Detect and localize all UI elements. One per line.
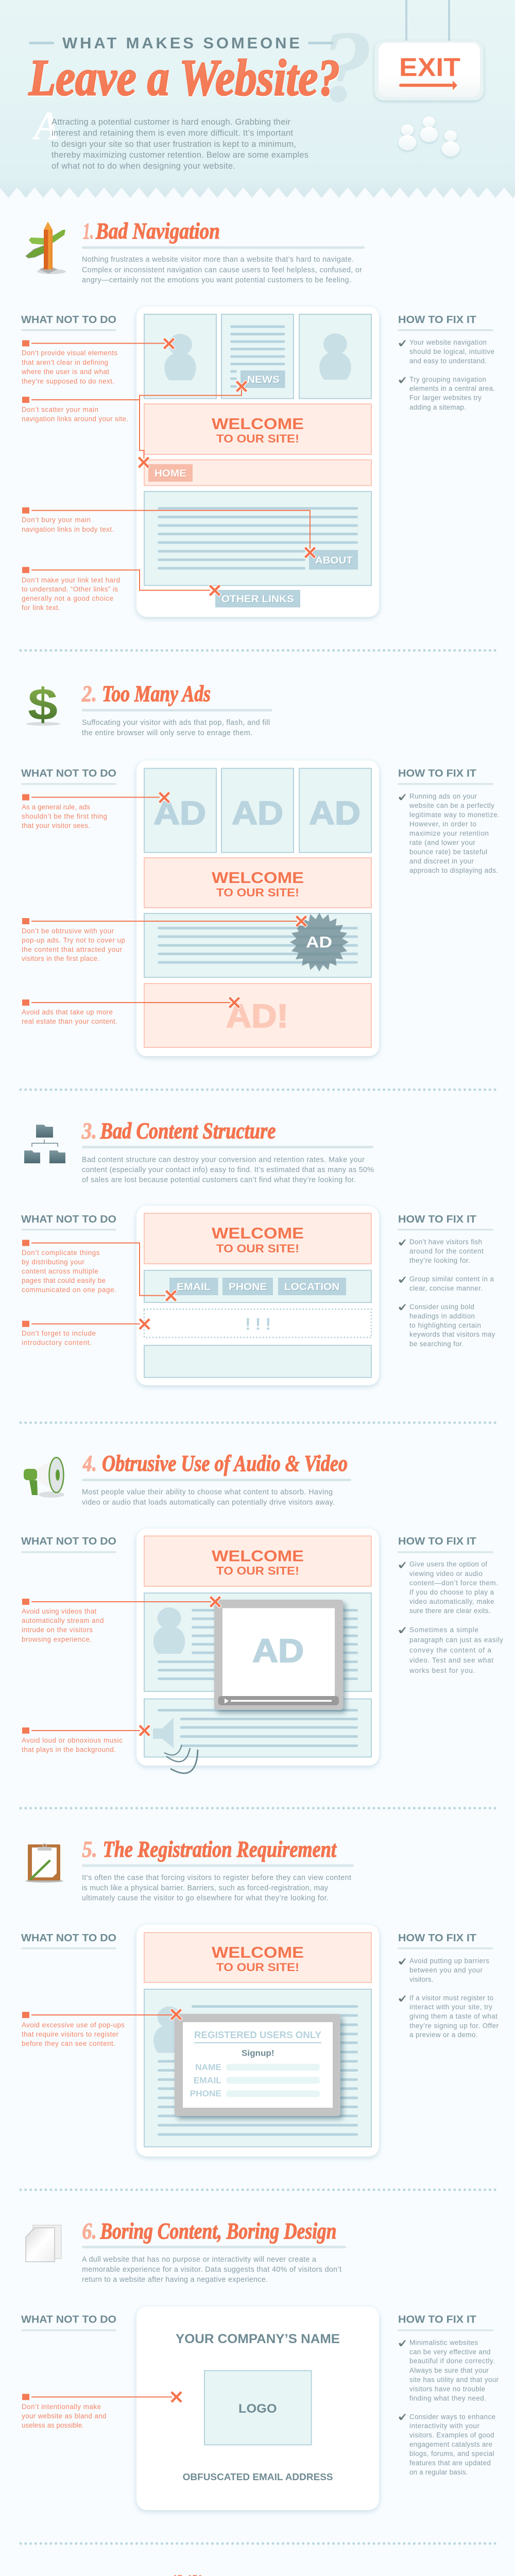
fix tip 1 [399, 1957, 489, 1983]
welcome banner: TO OUR SITE! [216, 1242, 299, 1255]
fix tip 1: If you do choose to play a [409, 1588, 494, 1596]
heading: Bad Navigation [95, 218, 220, 244]
callout 3 text: real estate than your content. [22, 1018, 117, 1025]
welcome banner: WELCOME [212, 1547, 304, 1565]
welcome banner [144, 1213, 371, 1264]
fix tip: and discreet in your [409, 857, 474, 865]
callout 2 text: navigation links around your site. [22, 415, 128, 422]
fix tip 1 [399, 338, 494, 365]
fix tip [399, 792, 500, 874]
callout 2 text: Don’t be obtrusive with your [22, 927, 114, 935]
callout 1 text: pages that could easily be [22, 1277, 106, 1284]
callout 1 text: Avoid using videos that [22, 1607, 97, 1615]
fix tip 3: headings in addition [409, 1312, 475, 1320]
description: ultimately cause the visitor to go elsewhere for what they’re looking for. [82, 1894, 329, 1903]
welcome banner [144, 858, 371, 908]
column with news link [221, 314, 294, 399]
fix tip 1: between you and your [409, 1967, 483, 1974]
how to fix it heading [398, 1933, 493, 1950]
fix tip 1: Don’t have visitors fish [409, 1238, 482, 1246]
website mockup panel [136, 1206, 379, 1385]
callout 3 text: navigation links in body text. [22, 526, 114, 533]
callout 2 [22, 380, 248, 469]
callout 3 [22, 507, 316, 558]
callout text: Don’t intentionally make [22, 2403, 101, 2411]
description: memorable experience for a visitor. Data suggests that 40% of visitors don’t [82, 2266, 341, 2274]
company name: YOUR COMPANY’S NAME [176, 2332, 340, 2346]
section 6: boring content boring design [21, 2218, 499, 2510]
how to fix it heading [398, 2314, 493, 2331]
fix tip 3: keywords that visitors may [409, 1331, 495, 1338]
fix tip: Running ads on your [409, 792, 477, 800]
callout 1 text: content across multiple [22, 1267, 98, 1275]
intro text: of what not to do when designing your website. [52, 162, 235, 171]
intro text: thereby maximizing customer retention. Below are some examples [52, 150, 308, 160]
fix tip 2: video. Test and see what [409, 1656, 493, 1664]
callout 2 text [22, 927, 125, 962]
callout 2 text: introductory content. [22, 1339, 92, 1347]
fix tip 2: elements in a central area. [409, 385, 495, 393]
callout 4 text: to understand. “Other links” is [22, 585, 118, 593]
fix tip 2: Try grouping navigation [409, 376, 486, 383]
fix tip: rate (and lower your [409, 839, 476, 846]
fix tip 1 [399, 1561, 498, 1615]
content block [144, 1345, 371, 1378]
heading: 2. [81, 681, 97, 706]
callout 1 text: Don’t complicate things [22, 1249, 100, 1257]
callout 1 text: Don’t provide visual elements [22, 349, 117, 357]
fix tip: approach to displaying ads. [409, 867, 498, 874]
callout 2 [22, 1724, 151, 1737]
fix tip 2: Group similar content in a [409, 1275, 494, 1283]
what not to do heading: WHAT NOT TO DO [21, 768, 116, 779]
welcome banner: WELCOME [212, 869, 304, 887]
callout text: your website as bland and [22, 2412, 106, 2420]
welcome banner [144, 1536, 371, 1586]
video popup: AD [252, 1632, 304, 1669]
registration popup: NAME [195, 2062, 221, 2072]
description: video or audio that loads automatically can potentially drive visitors away. [82, 1499, 335, 1507]
description: Complex or inconsistent navigation can cause users to feel helpless, confused, or [82, 266, 362, 275]
callout 2 [22, 915, 307, 927]
content block with person [144, 1593, 371, 1691]
callout 1 text: shouldn’t be the first thing [22, 812, 107, 820]
callout 3 text [22, 1008, 117, 1025]
what not to do heading [21, 314, 116, 331]
fix tip: bounce rate) be tasteful [409, 848, 487, 856]
section 7: poor legibility [20, 2571, 496, 2576]
fix tip 1: Your website navigation [409, 338, 487, 346]
body with popup ad [144, 913, 371, 977]
fix tip 1: sure there are clear exits. [409, 1607, 490, 1615]
description: return to a website after having a negative experience. [82, 2276, 268, 2284]
fix tip: website can be a perfectly [409, 802, 494, 809]
callout 1 text: As a general rule, ads [22, 803, 90, 811]
missing intro placeholder [144, 1309, 371, 1337]
registration popup: REGISTERED USERS ONLY [194, 2029, 322, 2040]
welcome banner: TO OUR SITE! [216, 886, 299, 899]
what not to do heading: WHAT NOT TO DO [21, 314, 116, 326]
what not to do heading: WHAT NOT TO DO [21, 1214, 116, 1225]
callout [22, 2391, 182, 2403]
what not to do heading [21, 1536, 116, 1553]
welcome banner [144, 1933, 371, 1982]
column with person [144, 314, 216, 399]
heading: 4. [82, 1451, 97, 1476]
fix tip 2: Consider ways to enhance [409, 2413, 495, 2420]
icon: signpost [26, 222, 66, 274]
description: Most people value their ability to choose what content to absorb. Having [82, 1488, 333, 1497]
fix tip 1: video automatically, make [409, 1598, 494, 1605]
how to fix it heading [398, 768, 493, 785]
welcome banner: WELCOME [212, 1943, 304, 1961]
how to fix it heading [398, 314, 493, 331]
description [82, 1156, 374, 1184]
ad column 1 [144, 768, 216, 853]
heading: Obtrusive Use of Audio & Video [102, 1451, 348, 1476]
intro text: Attracting a potential customer is hard enough. Grabbing their [52, 117, 290, 127]
content block [144, 1989, 371, 2147]
oversized ad: AD! [226, 997, 288, 1035]
fix tip 1 [399, 1238, 484, 1264]
callout 1 text: they’re supposed to do next. [22, 377, 114, 385]
callout 2 text: that plays in the background. [22, 1745, 116, 1753]
description [82, 2256, 341, 2284]
icon: folder tree [24, 1125, 65, 1163]
callout 2 text: Don’t scatter your main [22, 406, 98, 414]
callout 1 [22, 1240, 177, 1302]
body content with about link: ABOUT [315, 555, 353, 566]
heading: Bad Content Structure [100, 1118, 276, 1144]
what not to do heading: WHAT NOT TO DO [21, 1933, 116, 1944]
fix tip 2: works best for you. [409, 1667, 475, 1674]
icon: megaphone [24, 1458, 64, 1498]
heading: The Registration Requirement [103, 1837, 337, 1862]
ad column 2 [221, 768, 294, 853]
video popup [214, 1600, 343, 1710]
nav tabs [144, 1270, 371, 1302]
email address: OBFUSCATED EMAIL ADDRESS [183, 2472, 333, 2482]
what not to do heading [21, 1214, 116, 1230]
callout [22, 2008, 182, 2021]
registration popup: PHONE [190, 2089, 221, 2098]
heading: 3. [81, 1118, 97, 1144]
icon: speaker [153, 1718, 198, 1773]
icon: dollar sign: $ [28, 680, 58, 730]
fix tip 1: viewing video or audio [409, 1570, 483, 1578]
heading: Too Many Ads [102, 681, 211, 706]
three people icon [399, 116, 459, 157]
exit sign: EXIT [399, 53, 460, 81]
fix tip 1: site has utility and that your [409, 2376, 499, 2384]
missing intro placeholder: !!! [245, 1315, 271, 1333]
heading [82, 1451, 351, 1481]
registration popup [175, 2014, 340, 2116]
ad column 3: AD [309, 794, 360, 832]
section 1: bad navigation [21, 218, 495, 617]
ad column 3 [299, 768, 371, 853]
fix tip 2: clear, concise manner. [409, 1284, 483, 1292]
callout 2 text: pop-up ads. Try not to cover up [22, 937, 125, 944]
callout 4 [22, 567, 221, 597]
fix tip 3 [399, 1303, 495, 1348]
description [82, 719, 270, 737]
callout 1 text: that your visitor sees. [22, 822, 90, 829]
callout 1 [22, 1596, 221, 1608]
callout 1 text [21, 349, 117, 385]
description: Nothing frustrates a website visitor more than a website that’s hard to navigate. [82, 256, 354, 264]
nav tabs: EMAIL [177, 1281, 211, 1293]
body content with about link [144, 492, 371, 585]
callout text: before they can see content. [22, 2040, 115, 2047]
description: A dull website that has no purpose or interactivity will never create a [82, 2256, 316, 2264]
callout 1 text [22, 1249, 116, 1294]
fix tip 1: Minimalistic websites [409, 2338, 478, 2346]
fix tip 2: paragraph can just as easily [409, 1636, 503, 1643]
how to fix it heading [398, 1214, 493, 1230]
callout 3 [22, 996, 241, 1009]
description: Suffocating your visitor with ads that pop, flash, and fill [82, 719, 270, 727]
callout 1 text: by distributing your [22, 1258, 85, 1266]
welcome banner: WELCOME [212, 415, 304, 433]
callout 4 text [22, 577, 120, 612]
description [82, 256, 362, 284]
callout text: useless as possible. [22, 2421, 84, 2429]
callout text [22, 2021, 125, 2047]
callout 1 text: automatically stream and [22, 1617, 104, 1624]
fix tip 1: Always be sure that your [409, 2367, 489, 2375]
callout 1 text: where the user is and what [21, 368, 109, 376]
starburst [290, 913, 349, 972]
large pale question mark: ? [320, 10, 373, 124]
nav bar with home link [144, 460, 371, 485]
header background [0, 0, 515, 198]
how to fix it heading: HOW TO FIX IT [398, 2314, 476, 2326]
logo box: LOGO [238, 2402, 277, 2416]
what not to do heading: WHAT NOT TO DO [21, 1536, 116, 1547]
section 4: obtrusive audio and video [21, 1451, 503, 1773]
content block with speaker [144, 1699, 371, 1773]
intro text: interest and retaining them is even more difficult. It’s important [52, 129, 293, 138]
description [82, 1488, 335, 1507]
fix tip 2: visitors. Examples of good [409, 2431, 494, 2439]
website mockup panel [136, 760, 379, 1056]
fix tip 2: adding a sitemap. [409, 403, 466, 411]
welcome banner: TO OUR SITE! [216, 1564, 299, 1578]
how to fix it heading: HOW TO FIX IT [398, 1536, 476, 1547]
fix tip 2: interactivity with your [409, 2422, 480, 2430]
fix tip 3: be searching for. [409, 1340, 464, 1348]
how to fix it heading: HOW TO FIX IT [398, 768, 476, 779]
callout 2 text: the content that attracted your [22, 946, 123, 953]
icon: blank pages [26, 2225, 61, 2262]
callout 3 text: Don’t bury your main [22, 516, 91, 524]
fix tip 1: finding what they need. [409, 2394, 486, 2402]
heading [81, 1118, 373, 1148]
fix tip 1: beautiful if done correctly. [409, 2357, 495, 2365]
fix tip 2: convey the content of a [409, 1647, 492, 1654]
fix tip 1 [399, 2338, 499, 2402]
callout 1 text: communicated on one page. [22, 1286, 116, 1294]
fix tip 2: If a visitor must register to [409, 1994, 493, 2002]
callout 2 text [22, 1736, 123, 1753]
title line two: Leave a Website? [28, 49, 340, 106]
fix tip 2: blogs, forums, and special [409, 2450, 494, 2458]
registration popup: Signup! [242, 2048, 274, 2058]
callout 1 text: intrude on the visitors [22, 1626, 93, 1634]
callout 3 text [22, 516, 114, 533]
website mockup panel [136, 307, 379, 617]
fix tip 1: around for the content [409, 1247, 484, 1255]
ad column 1: AD [153, 794, 206, 832]
callout text: Avoid excessive use of pop-ups [22, 2021, 125, 2029]
fix tip 1: Give users the option of [409, 1561, 487, 1568]
fix tip 2: features that are updated [409, 2459, 491, 2467]
heading [82, 2571, 320, 2576]
how to fix it heading: HOW TO FIX IT [398, 314, 476, 326]
what not to do heading [21, 768, 116, 785]
heading: 5. [82, 1837, 97, 1862]
callout 4 text: generally not a good choice [22, 595, 113, 602]
nav bar with home link: HOME [154, 468, 186, 479]
fix tip 2: engagement catalysts are [409, 2441, 492, 2448]
description: of sales are lost because potential customers can’t find what they’re looking for. [82, 1176, 356, 1184]
fix tip: However, in order to [409, 820, 476, 828]
fix tip 1: they’re looking for. [409, 1257, 470, 1264]
welcome banner: WELCOME [212, 1224, 304, 1242]
heading [81, 681, 272, 711]
fix tip 1: and easy to understand. [409, 357, 487, 365]
how to fix it heading: HOW TO FIX IT [398, 1214, 476, 1225]
heading [82, 2218, 346, 2248]
heading [82, 218, 365, 249]
fix tip 2: Sometimes a simple [409, 1626, 478, 1634]
callout 2 text [22, 406, 128, 422]
intro text [52, 117, 308, 171]
fix tip 2 [399, 1994, 499, 2039]
section 2: too many ads [21, 680, 500, 1056]
other links tag [215, 590, 300, 607]
fix tip 2 [399, 1275, 494, 1292]
website mockup panel [136, 1925, 379, 2157]
icon: clipboard [25, 1843, 63, 1883]
ad column 2: AD [232, 794, 283, 832]
description: angry—certainly not the emotions you want potential customers to be feeling. [82, 276, 351, 284]
intro text: to design your site so that user frustration is kept to a minimum, [52, 140, 296, 149]
fix tip 1: should be logical, intuitive [409, 348, 494, 355]
callout 1 text [22, 803, 107, 829]
welcome banner: TO OUR SITE! [216, 432, 299, 445]
popup ad label: AD [306, 933, 332, 951]
other links tag: OTHER LINKS [221, 594, 294, 605]
nav tabs: PHONE [229, 1281, 267, 1293]
fix tip 1: visitors have no trouble [409, 2385, 485, 2393]
title line one: WHAT MAKES SOMEONE [62, 34, 300, 52]
callout 1 [22, 337, 175, 350]
fix tip 2 [399, 1626, 503, 1674]
callout 2 text [22, 1329, 96, 1347]
section 3: bad content structure [21, 1118, 495, 1385]
description: is much like a physical barrier. Barriers, such as forced-registration, may [82, 1884, 329, 1892]
fix tip: legitimate way to monetize. [409, 811, 500, 819]
description: It’s often the case that forcing visitors to register before they can view content [82, 1874, 351, 1882]
fix tip 2: For larger websites try [409, 394, 482, 401]
callout 1 text: that aren’t clear in defining [22, 359, 108, 366]
nav tabs: LOCATION [284, 1281, 340, 1293]
fix tip 2: giving them a taste of what [409, 2012, 497, 2020]
how to fix it heading: HOW TO FIX IT [398, 1933, 476, 1944]
oversized ad [144, 984, 371, 1047]
description: Bad content structure can destroy your conversion and retention rates. Make your [82, 1156, 365, 1164]
fix tip 2 [399, 376, 495, 411]
fix tip 2: interact with your site, try [409, 2003, 492, 2011]
column with person [299, 314, 371, 399]
fix tip: maximize your retention [409, 829, 489, 837]
welcome banner [144, 404, 371, 454]
callout 1 [22, 791, 170, 804]
callout 1 text [22, 1607, 104, 1643]
heading: 6. [82, 2218, 97, 2244]
description: content (especially your contact info) easy to find. It’s estimated that as many as 50% [82, 1166, 374, 1174]
fix tip 2: a preview or a demo. [409, 2031, 478, 2039]
heading: Boring Content, Boring Design [100, 2218, 337, 2244]
fix tip 3: Consider using bold [409, 1303, 474, 1311]
description [82, 1874, 351, 1903]
fix tip 1: Avoid putting up barriers [409, 1957, 489, 1965]
what not to do heading [21, 2314, 116, 2331]
zigzag edge [0, 188, 515, 198]
logo box [204, 2370, 312, 2445]
what not to do heading [21, 1933, 116, 1950]
section 5: the registration requirement [21, 1837, 499, 2157]
fix tip 1: can be very effective and [409, 2348, 490, 2355]
website mockup panel [136, 1529, 379, 1773]
callout 1 text: browsing experience. [22, 1635, 92, 1643]
exit sign [374, 0, 484, 100]
fix tip 1: visitors. [409, 1975, 434, 1983]
fix tip 2: they’re signing up for. Offer [409, 2022, 499, 2029]
fix tip 2: on a regular basis. [409, 2468, 468, 2476]
callout text: that require visitors to register [22, 2030, 119, 2038]
callout 4 text: Don’t make your link text hard [22, 577, 120, 584]
callout 2 text: visitors in the first place. [22, 955, 99, 962]
fix tip 1: content—don’t force them. [409, 1579, 498, 1587]
callout 2 text: Don’t forget to include [22, 1329, 96, 1337]
registration popup: EMAIL [194, 2076, 221, 2086]
heading: 1. [83, 218, 94, 244]
column with news link: NEWS [247, 374, 280, 385]
header [0, 0, 515, 198]
welcome banner: TO OUR SITE! [216, 1961, 299, 1974]
fix tip 3: to highlighting certain [409, 1321, 481, 1329]
what not to do heading: WHAT NOT TO DO [21, 2314, 116, 2326]
callout 4 text: for link text. [22, 604, 60, 612]
callout 2 text: Avoid loud or obnoxious music [22, 1736, 123, 1744]
description: the entire browser will only serve to enrage them. [82, 729, 252, 737]
drop cap: A [31, 103, 60, 148]
callout text [22, 2403, 106, 2429]
how to fix it heading [398, 1536, 493, 1553]
callout 2 [22, 1318, 151, 1330]
callout 3 text: Avoid ads that take up more [22, 1008, 113, 1016]
fix tip 2 [399, 2413, 495, 2476]
website mockup panel [136, 2307, 379, 2510]
